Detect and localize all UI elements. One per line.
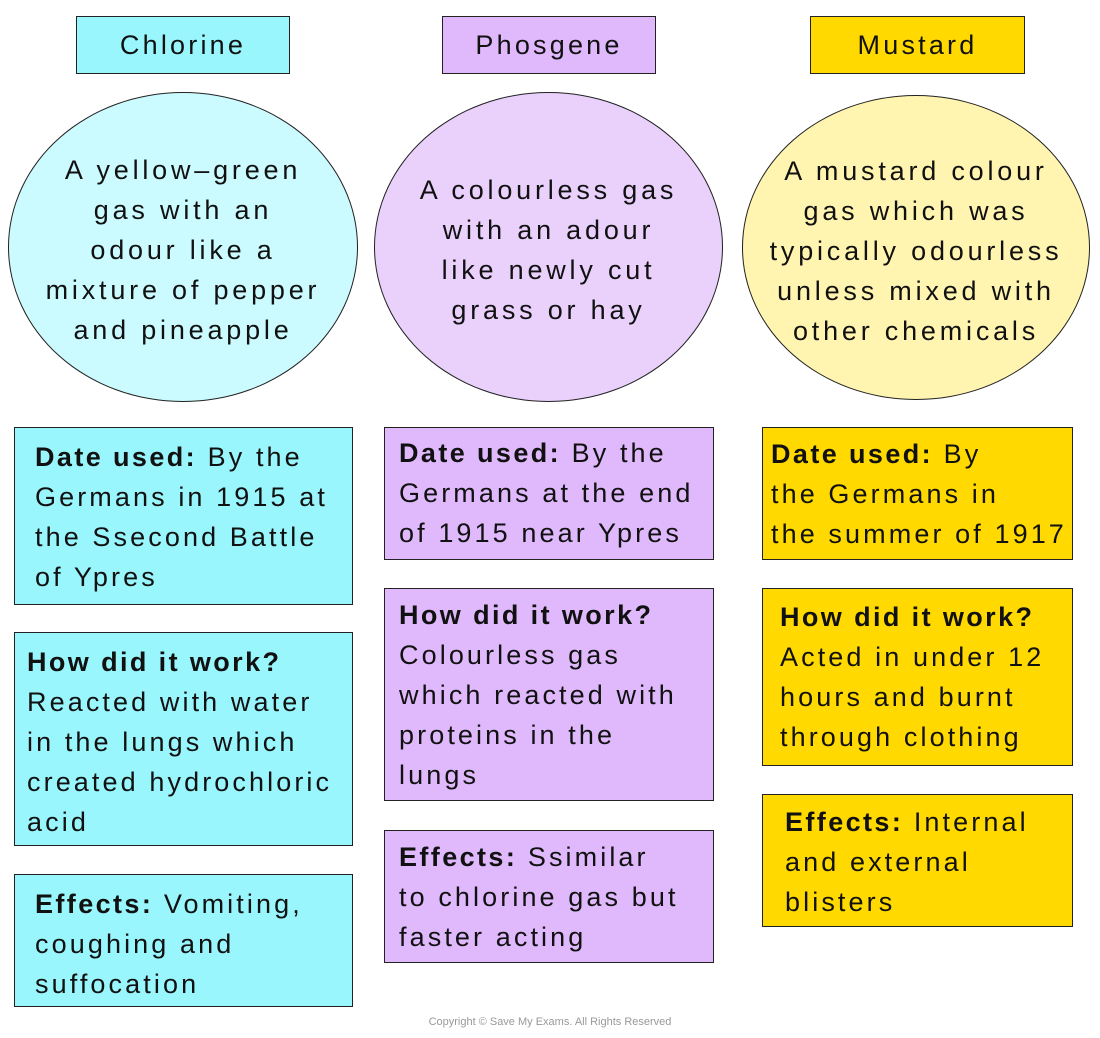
circle: chlorine description: odour like a: [90, 235, 276, 265]
box: mustard how did it work: hours and burnt: [780, 682, 1016, 712]
box: chlorine how did it work: acid: [27, 807, 89, 837]
circle: mustard description: A mustard colour: [784, 156, 1048, 186]
circle: phosgene description: with an adour: [443, 215, 654, 245]
box: mustard date used: [762, 427, 1073, 560]
box: chlorine date used: Germans in 1915 at: [35, 482, 328, 512]
box: chlorine date used: [14, 427, 353, 605]
circle: chlorine description: [8, 92, 358, 402]
title: Mustard: [810, 16, 1025, 74]
box: phosgene date used: Germans at the end: [399, 478, 693, 508]
box: mustard effects: [762, 794, 1073, 927]
circle: mustard description: typically odourless: [770, 236, 1062, 266]
box: mustard date used: Date used: By: [771, 439, 981, 469]
box: phosgene how did it work: which reacted with: [399, 680, 677, 710]
box: mustard effects: blisters: [785, 887, 895, 917]
title: Chlorine: Chlorine: [120, 30, 246, 60]
circle: phosgene description: like newly cut: [442, 255, 655, 285]
box: phosgene how did it work: lungs: [399, 760, 479, 790]
circle: chlorine description: gas with an: [94, 195, 272, 225]
box: mustard how did it work: Acted in under 12: [780, 642, 1044, 672]
title: Phosgene: [442, 16, 656, 74]
box: phosgene effects: Effects: Ssimilar: [399, 842, 649, 872]
circle: chlorine description: A yellow–green: [65, 155, 301, 185]
box: phosgene effects: faster acting: [399, 922, 586, 952]
circle: mustard description: unless mixed with: [777, 276, 1055, 306]
box: phosgene how did it work: Colourless gas: [399, 640, 621, 670]
box: mustard how did it work: through clothing: [780, 722, 1022, 752]
box: phosgene effects: [384, 830, 714, 963]
title: Mustard: Mustard: [858, 30, 977, 60]
box: mustard how did it work: [762, 588, 1073, 766]
copyright: Copyright © Save My Exams. All Rights Reserved: [429, 1016, 671, 1028]
box: phosgene date used: Date used: By the: [399, 438, 667, 468]
box: phosgene date used: of 1915 near Ypres: [399, 518, 682, 548]
box: mustard effects: and external: [785, 847, 971, 877]
box: phosgene how did it work: How did it work?: [399, 600, 653, 630]
circle: chlorine description: and pineapple: [73, 315, 293, 345]
box: chlorine effects: [14, 874, 353, 1007]
circle: phosgene description: A colourless gas: [420, 175, 677, 205]
box: mustard how did it work: How did it work?: [780, 602, 1034, 632]
circle: mustard description: gas which was: [804, 196, 1028, 226]
circle: phosgene description: grass or hay: [451, 295, 646, 325]
box: chlorine date used: Date used: By the: [35, 442, 303, 472]
circle: chlorine description: mixture of pepper: [46, 275, 320, 305]
box: phosgene date used: [384, 427, 714, 560]
circle: phosgene description: [374, 92, 723, 402]
box: phosgene effects: to chlorine gas but: [399, 882, 679, 912]
box: chlorine effects: Effects: Vomiting,: [35, 889, 303, 919]
box: chlorine how did it work: in the lungs which: [27, 727, 297, 757]
box: chlorine how did it work: How did it work?: [27, 647, 281, 677]
box: chlorine effects: suffocation: [35, 969, 199, 999]
box: chlorine how did it work: created hydrochloric: [27, 767, 332, 797]
title: Chlorine: [76, 16, 290, 74]
box: mustard date used: the summer of 1917: [771, 519, 1067, 549]
box: chlorine how did it work: [14, 632, 353, 846]
box: chlorine date used: of Ypres: [35, 562, 158, 592]
box: mustard date used: the Germans in: [771, 479, 999, 509]
box: chlorine effects: coughing and: [35, 929, 234, 959]
box: mustard effects: Effects: Internal: [785, 807, 1029, 837]
box: phosgene how did it work: proteins in the: [399, 720, 615, 750]
box: chlorine date used: the Ssecond Battle: [35, 522, 317, 552]
box: phosgene how did it work: [384, 588, 714, 801]
box: chlorine how did it work: Reacted with water: [27, 687, 312, 717]
title: Phosgene: Phosgene: [475, 30, 623, 60]
circle: mustard description: other chemicals: [793, 316, 1039, 346]
circle: mustard description: [742, 95, 1090, 400]
